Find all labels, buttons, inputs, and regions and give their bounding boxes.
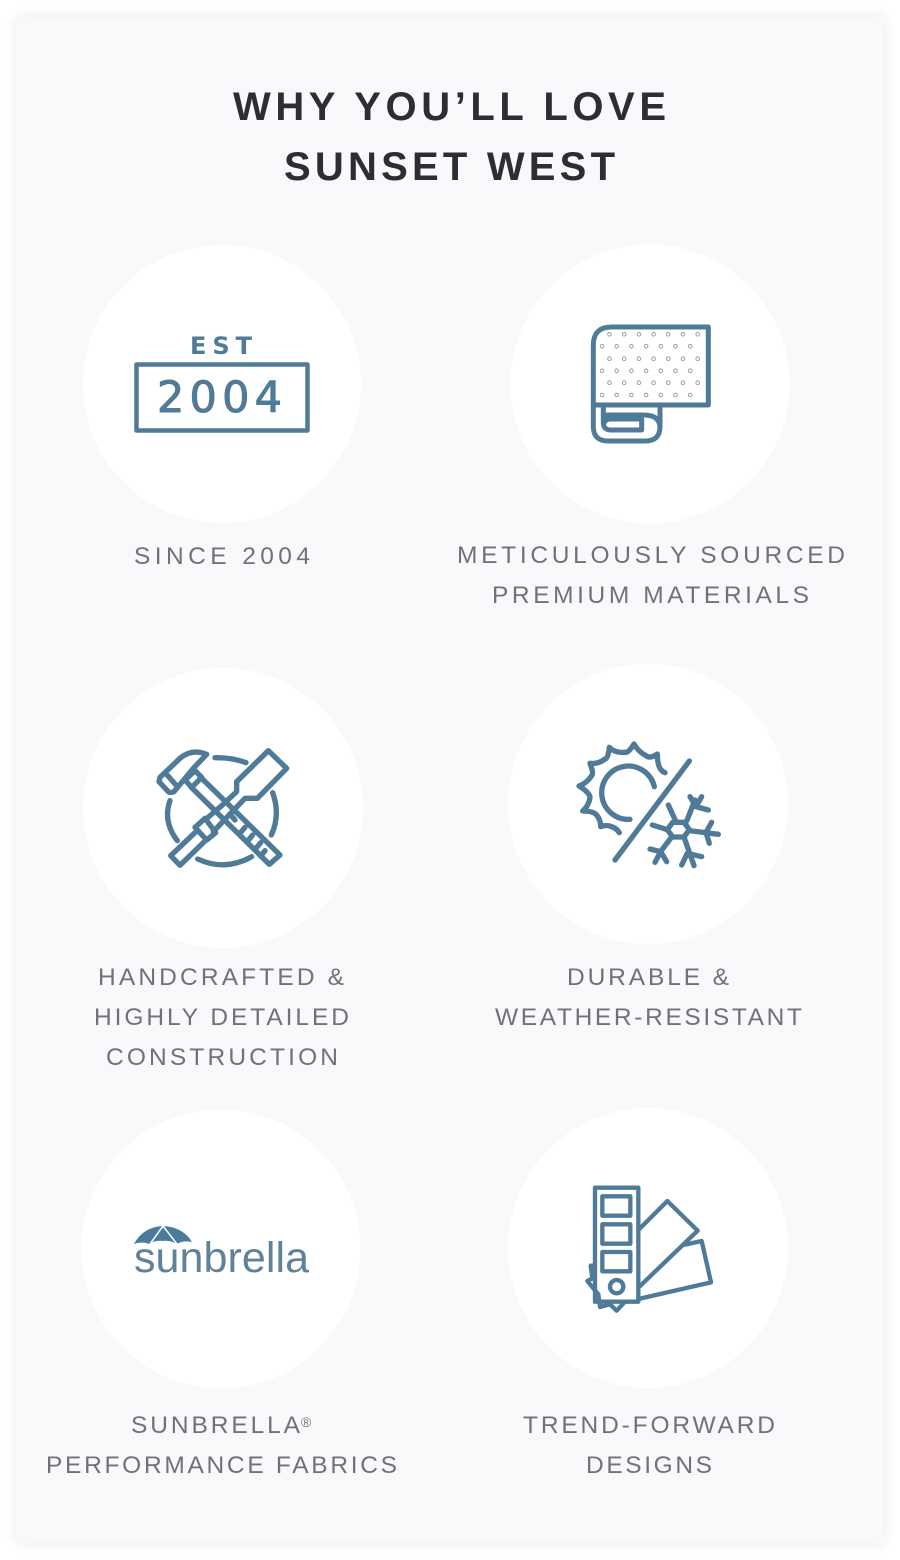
- label: durable and weather-resistant: [495, 964, 802, 1031]
- label: handcrafted construction: [94, 964, 349, 1071]
- title: SUNSET WEST: [284, 145, 615, 189]
- label: premium materials: METICULOUSLY SOURCED: [457, 542, 845, 569]
- icon: crossed hammer and chisel: [159, 751, 287, 865]
- panel: since 2004: [83, 245, 361, 570]
- label: handcrafted construction: HANDCRAFTED &: [98, 964, 344, 991]
- label: premium materials: [457, 542, 845, 609]
- panel: trend-forward designs: [508, 1108, 788, 1479]
- icon: fabric roll: [593, 327, 708, 441]
- label: handcrafted construction: HIGHLY DETAILED: [94, 1004, 349, 1031]
- icon: sun and snowflake: [579, 744, 718, 866]
- label: since 2004: SINCE 2004: [134, 543, 310, 570]
- label: handcrafted construction: CONSTRUCTION: [106, 1044, 338, 1071]
- label: durable and weather-resistant: DURABLE &: [567, 964, 729, 991]
- icon: swatch fan: [587, 1188, 711, 1311]
- label: premium materials: PREMIUM MATERIALS: [492, 582, 809, 609]
- panel: sunbrella fabrics: [46, 1110, 397, 1479]
- panel: premium materials: [457, 244, 845, 609]
- label: trend-forward designs: DESIGNS: [586, 1452, 712, 1479]
- label: sunbrella performance fabrics: ®: [301, 1414, 312, 1430]
- label: trend-forward designs: [523, 1412, 775, 1479]
- label: sunbrella performance fabrics: PERFORMANCE FABRICS: [46, 1452, 397, 1479]
- icon: established 2004 badge: EST: [190, 332, 253, 360]
- panel: handcrafted construction: [83, 668, 363, 1071]
- icon: established 2004 badge: [136, 332, 308, 430]
- label: durable and weather-resistant: WEATHER-RESISTANT: [495, 1004, 802, 1031]
- icon: established 2004 badge: 2004: [157, 373, 282, 423]
- label: trend-forward designs: TREND-FORWARD: [523, 1412, 775, 1439]
- label: sunbrella performance fabrics: [46, 1412, 397, 1479]
- title: WHY YOU’LL LOVE: [233, 85, 666, 129]
- panel: durable and weather-resistant: [495, 664, 802, 1031]
- icon: sunbrella logo: sunbrella: [134, 1234, 309, 1282]
- title: [233, 85, 666, 189]
- label: sunbrella performance fabrics: SUNBRELLA: [131, 1412, 301, 1439]
